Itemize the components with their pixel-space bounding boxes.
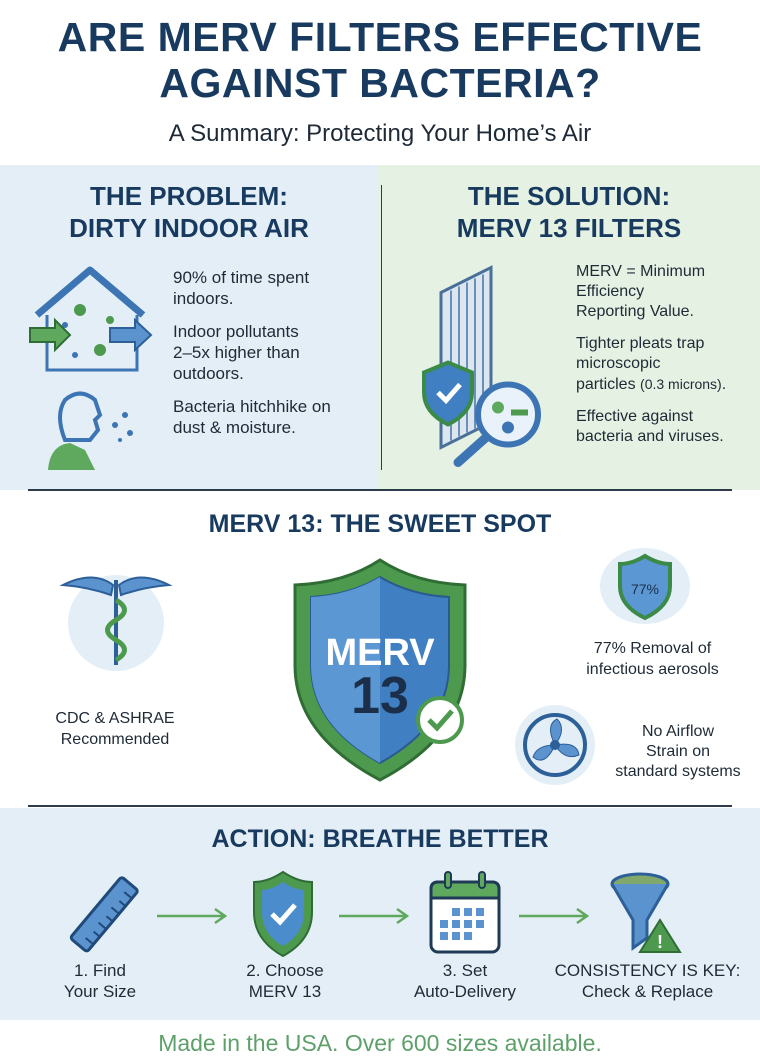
arrow 2 [339,908,409,924]
step 3 [414,961,516,1001]
text: problem facts: Indoor pollutants [173,322,299,341]
text: solution facts: Tighter pleats trap [576,335,704,352]
text: problem facts: 2–5x higher than [173,343,300,362]
text: solution facts: MERV = Minimum [576,263,705,280]
text: solution facts: microscopic [576,355,660,372]
text: solution facts [576,263,726,445]
icon: fan [515,705,595,785]
step 2 [246,961,324,1001]
title [58,14,702,106]
heading: solution [457,181,681,243]
icon: caduceus [68,575,164,671]
text: problem facts: outdoors. [173,364,244,383]
text: airflow: standard systems [615,763,741,780]
step 1: 1. Find [74,961,126,980]
icon: calendar [430,871,500,954]
icon: shield check [253,870,313,958]
text: CDC: CDC & ASHRAE [55,710,175,727]
icon: 77% shield [600,548,690,624]
panel: solution [378,165,760,490]
text: solution facts: Efficiency [576,283,644,300]
step 2: 2. Choose [246,961,324,980]
step 4: Check & Replace [582,982,713,1001]
step labels [64,961,740,1001]
text: problem facts: Bacteria hitchhike on [173,397,331,416]
icon: filter with magnifier [422,265,541,467]
heading: problem: DIRTY INDOOR AIR [69,213,309,243]
title: AGAINST BACTERIA? [159,60,601,106]
text: 77%: infectious aerosols [586,661,719,678]
heading: solution: MERV 13 FILTERS [457,213,681,243]
step 4: CONSISTENCY IS KEY: [555,961,740,980]
footer: Made in the USA. Over 600 sizes available. [158,1030,602,1056]
text: problem facts [173,268,331,437]
icon: MERV 13 shield: MERV [325,632,435,674]
panel: action [0,808,760,1020]
title: ARE MERV FILTERS EFFECTIVE [58,14,702,60]
subtitle: A Summary: Protecting Your Home’s Air [169,120,591,147]
text: airflow: No Airflow [642,723,714,740]
step 2: MERV 13 [249,982,321,1001]
text: problem facts: dust & moisture. [173,418,296,437]
icon: funnel warning: ! [657,932,663,952]
text: solution facts: bacteria and viruses. [576,428,724,445]
heading: action: ACTION: BREATHE BETTER [211,825,549,853]
heading: problem: THE PROBLEM: [90,181,288,211]
icon: MERV 13 shield: 13 [351,667,409,725]
text: 77% [586,640,719,678]
text: problem facts: 90% of time spent [173,268,309,287]
step 3: 3. Set [443,961,487,980]
icon: 77% shield: 77% [631,581,659,597]
step 1 [64,961,136,1001]
step 1: Your Size [64,982,136,1001]
icon: house [29,266,152,372]
text: airflow: Strain on [646,743,710,760]
text: CDC: Recommended [61,731,169,748]
text: CDC [55,710,175,748]
icon: person sneezing [48,391,133,470]
heading: sweet spot: MERV 13: THE SWEET SPOT [209,510,551,538]
step 3: Auto-Delivery [414,982,516,1001]
panel: problem [0,165,378,490]
text: solution facts: Reporting Value. [576,303,694,320]
heading: problem [69,181,309,243]
heading: solution: THE SOLUTION: [468,181,670,211]
step 4 [555,961,740,1001]
icon: MERV 13 shield [294,558,466,782]
arrow 1 [157,908,227,924]
text: solution facts: Effective against [576,408,693,425]
arrow 3 [519,908,589,924]
text: problem facts: indoors. [173,289,233,308]
text: solution facts: particles (0.3 microns). [576,376,726,393]
text: airflow [615,723,741,780]
icon: funnel warning [610,872,682,953]
text: 77%: 77% Removal of [594,640,711,657]
icon: ruler [70,876,139,952]
